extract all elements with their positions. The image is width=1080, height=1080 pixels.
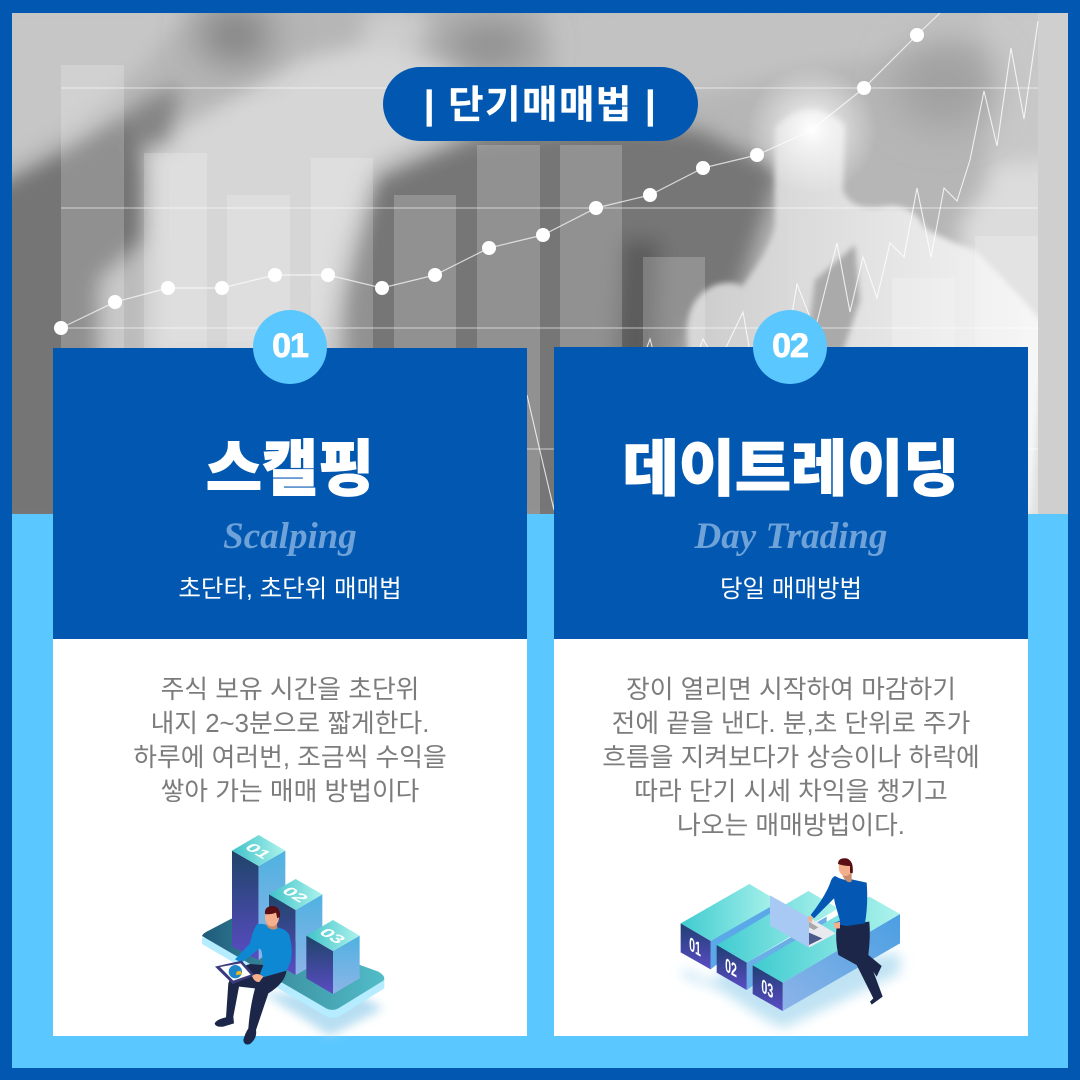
grid lines bbox=[61, 88, 1038, 449]
body text: scalping: 내지 2~3분으로 짧게한다. bbox=[151, 710, 429, 738]
subtitle: day trading: 당일 매매방법 bbox=[720, 576, 862, 603]
body text: scalping bbox=[133, 676, 447, 806]
bar 01 bbox=[232, 835, 285, 960]
badge: 01: 01 bbox=[272, 327, 308, 365]
body text: scalping: 하루에 여러번, 조금씩 수익을 bbox=[133, 744, 447, 772]
block 02 bbox=[717, 891, 838, 990]
dotted rising line chart bbox=[54, 13, 940, 335]
man with laptop bbox=[808, 858, 883, 1005]
body text: day trading bbox=[602, 676, 980, 840]
panel: scalping bbox=[53, 348, 527, 1036]
block 03 bbox=[753, 897, 900, 1011]
body text: day trading: 전에 끝을 낸다. 분,초 단위로 주가 bbox=[612, 710, 970, 738]
body text: scalping: 쌓아 가는 매매 방법이다 bbox=[161, 778, 419, 806]
laptop bbox=[770, 895, 836, 948]
panel: day trading bbox=[554, 347, 1028, 1036]
badge: 02 bbox=[753, 310, 827, 384]
english label: scalping: Scalping bbox=[223, 516, 357, 557]
body text: day trading: 흐름을 지켜보다가 상승이나 하락에 bbox=[602, 744, 980, 772]
body text: day trading: 장이 열리면 시작하여 마감하기 bbox=[626, 676, 956, 704]
panel header: scalping bbox=[53, 348, 527, 639]
illustration: man with tablet on bar blocks bbox=[202, 835, 384, 1044]
body text: scalping: 주식 보유 시간을 초단위 bbox=[161, 676, 419, 704]
translucent bars bbox=[61, 65, 1038, 514]
badge: 02: 02 bbox=[772, 327, 808, 365]
hand bbox=[687, 65, 1047, 514]
shadow bbox=[205, 960, 383, 1036]
bar 02 bbox=[269, 879, 322, 975]
subtitle: scalping: 초단타, 초단위 매매법 bbox=[178, 576, 402, 603]
platform bbox=[202, 918, 384, 1018]
body text: day trading: 따라 단기 시세 차익을 챙기고 bbox=[634, 778, 948, 806]
bar 01: 01 bbox=[241, 841, 276, 861]
title pill: | 단기매매법 | bbox=[424, 84, 657, 127]
body text: day trading: 나오는 매매방법이다. bbox=[677, 812, 905, 840]
block 01: 01 bbox=[689, 933, 701, 962]
bar 03 bbox=[306, 920, 360, 994]
zigzag line chart bbox=[527, 21, 1038, 510]
bar 03: 03 bbox=[315, 926, 350, 946]
heading: scalping: 스캘핑 bbox=[206, 435, 374, 503]
photo background: grey chart and hand bbox=[12, 13, 1068, 514]
panel header: day trading bbox=[554, 347, 1028, 639]
block 03: 03 bbox=[761, 975, 773, 1004]
badge: 01 bbox=[253, 310, 327, 384]
shadows bbox=[683, 950, 900, 1028]
block 01 bbox=[681, 884, 779, 969]
light blue lower band bbox=[12, 514, 1068, 1068]
block 02: 02 bbox=[725, 954, 737, 983]
man with tablet bbox=[215, 906, 292, 1044]
english label: day trading: Day Trading bbox=[695, 516, 887, 557]
title pill bbox=[383, 67, 698, 141]
illustration: man with laptop on number blocks bbox=[680, 858, 906, 1033]
bar 02: 02 bbox=[278, 884, 313, 905]
heading: day trading: 데이트레이딩 bbox=[623, 435, 959, 503]
